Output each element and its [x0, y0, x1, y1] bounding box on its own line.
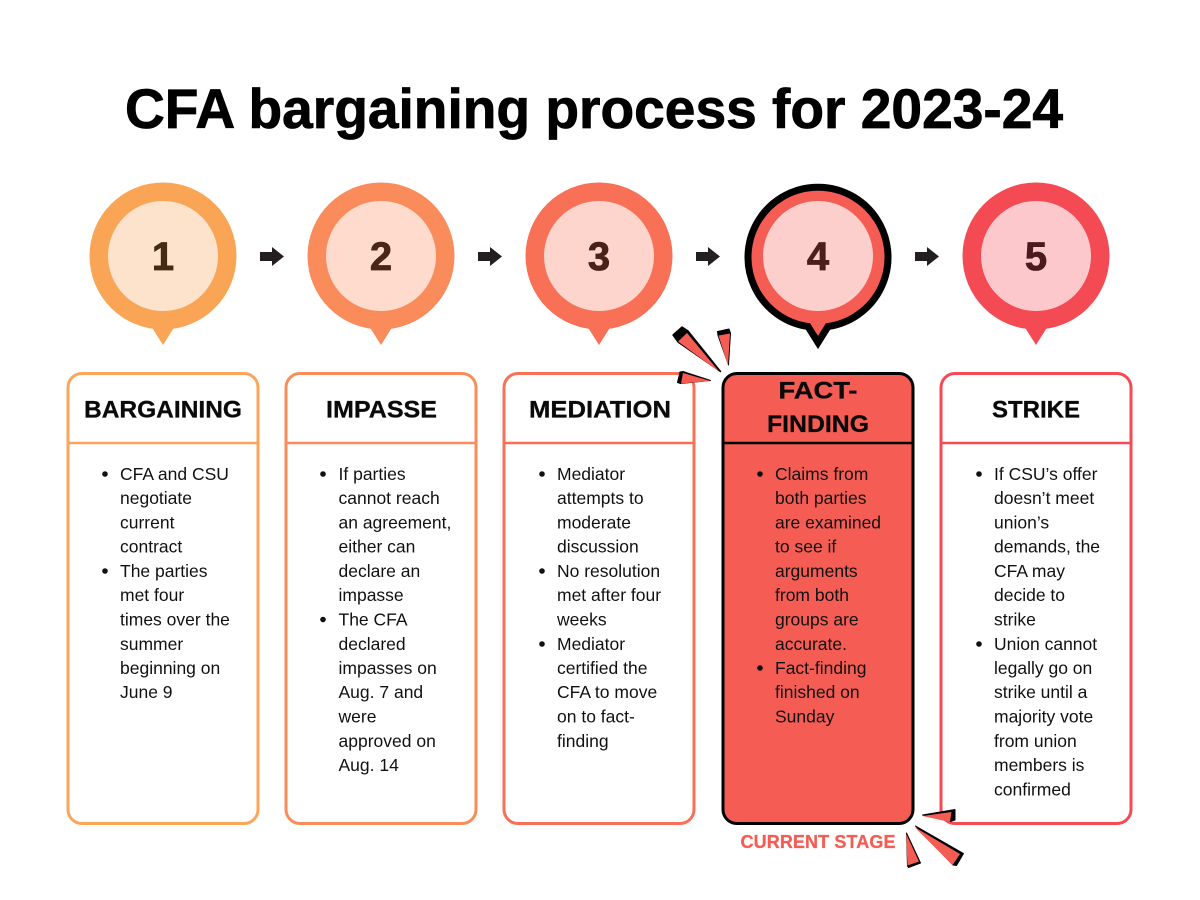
bullet list: mediation: on to fact- — [557, 706, 635, 726]
bullet list: impasse: were — [338, 706, 376, 726]
bullet list: mediation: moderate — [557, 512, 631, 532]
bullet list: impasse: The CFA — [338, 610, 408, 630]
icon: burst marks top left of current stage — [673, 327, 730, 384]
bullet list: fact-finding: both parties — [775, 488, 867, 508]
bullet list: mediation: discussion — [557, 536, 639, 556]
bullet list: strike: strike until a — [994, 682, 1088, 702]
bullet list: strike: members is — [994, 755, 1085, 775]
bullet list: mediation: finding — [557, 731, 609, 751]
bullet list: fact-finding: from both — [775, 585, 849, 605]
heading: impasse: IMPASSE — [326, 396, 437, 424]
bullet list: fact-finding: Fact-finding — [775, 658, 866, 678]
bullet list: bargaining: June 9 — [120, 682, 173, 702]
bullet list: mediation: No resolution — [557, 561, 660, 581]
bullet list: strike: If CSU’s offer — [994, 464, 1098, 484]
bullet list: fact-finding: Claims from — [775, 464, 868, 484]
bullet list: strike: from union — [994, 731, 1077, 751]
bullet list: bargaining: times over the — [120, 610, 230, 630]
bullet list: strike — [976, 464, 1100, 800]
panel: impasse — [286, 374, 476, 824]
bullet list: strike: Union cannot — [994, 634, 1097, 654]
bullet list: strike: union’s — [994, 512, 1049, 532]
step 4 marker (current): 4 — [807, 235, 830, 279]
step 1 marker: 1 — [152, 235, 174, 279]
arrow 1 to 2 — [260, 247, 284, 266]
bullet list: fact-finding: arguments — [775, 561, 858, 581]
arrow 3 to 4 — [696, 247, 720, 266]
bullet list: mediation: met after four — [557, 585, 661, 605]
step 5 marker: 5 — [1025, 235, 1047, 279]
heading: bargaining: BARGAINING — [84, 396, 242, 424]
bullet list: impasse: an agreement, — [338, 512, 451, 532]
bullet list: strike: majority vote — [994, 706, 1093, 726]
bullet list: mediation: attempts to — [557, 488, 644, 508]
panel: strike — [941, 374, 1131, 824]
bullet list: impasse: Aug. 14 — [338, 755, 399, 775]
arrow 2 to 3 — [478, 247, 502, 266]
bullet list: bargaining: CFA and CSU — [120, 464, 229, 484]
bullet list: bargaining: contract — [120, 536, 182, 556]
bullet list: impasse: approved on — [338, 731, 436, 751]
bullet list: impasse: declared — [338, 634, 406, 654]
bullet list: strike: decide to — [994, 585, 1065, 605]
title: CFA bargaining process for 2023-24 — [125, 77, 1063, 140]
bullet list: bargaining: current — [120, 512, 175, 532]
step 2 marker — [308, 182, 454, 345]
bullet list: fact-finding: accurate. — [775, 634, 847, 654]
bullet list: bargaining: negotiate — [120, 488, 192, 508]
bullet list: fact-finding: to see if — [775, 536, 836, 556]
bullet list: mediation: certified the — [557, 658, 647, 678]
bullet list: impasse: If parties — [338, 464, 406, 484]
bullet list: strike: strike — [994, 610, 1036, 630]
bullet list: bargaining: summer — [120, 634, 183, 654]
bullet list: fact-finding: finished on — [775, 682, 860, 702]
step 2 marker: 2 — [370, 235, 392, 279]
bullet list: strike: confirmed — [994, 780, 1071, 800]
bullet list: mediation: weeks — [556, 610, 607, 630]
bullet list: impasse: impasse — [338, 585, 404, 605]
bullet list: strike: doesn’t meet — [994, 488, 1094, 508]
panel: mediation — [504, 374, 694, 824]
step 3 marker — [526, 182, 672, 345]
step 4 marker (current) — [748, 187, 888, 342]
bullet list: mediation: CFA to move — [557, 682, 657, 702]
arrow 4 to 5 — [915, 247, 939, 266]
bullet list: mediation — [539, 464, 661, 751]
heading: fact-finding — [767, 378, 869, 438]
bullet list: mediation: Mediator — [557, 464, 625, 484]
bullet list: bargaining: met four — [120, 585, 184, 605]
bullet list: fact-finding: groups are — [775, 610, 859, 630]
heading: fact-finding: FINDING — [767, 411, 869, 438]
icon: burst marks bottom right of current stage — [906, 810, 964, 868]
bullet list: impasse: either can — [338, 536, 415, 556]
step 1 marker — [90, 182, 236, 345]
heading: fact-finding: FACT- — [778, 378, 858, 404]
bullet list: impasse: declare an — [338, 561, 420, 581]
bullet list: fact-finding — [757, 464, 881, 726]
bullet list: impasse: cannot reach — [338, 488, 440, 508]
bullet list: mediation: Mediator — [557, 634, 625, 654]
bullet list: bargaining: beginning on — [120, 658, 220, 678]
bullet list: fact-finding: are examined — [775, 512, 881, 532]
current stage label: CURRENT STAGE — [740, 832, 896, 852]
panel: bargaining — [68, 374, 258, 824]
bullet list: bargaining — [102, 464, 230, 702]
bullet list: strike: demands, the — [994, 536, 1100, 556]
step 3 marker: 3 — [588, 235, 610, 279]
bullet list: impasse: Aug. 7 and — [338, 682, 423, 702]
heading: strike: STRIKE — [992, 396, 1080, 424]
bullet list: impasse: impasses on — [338, 658, 437, 678]
bullet list: bargaining: The parties — [120, 561, 208, 581]
panel: fact-finding (current stage) — [723, 374, 913, 824]
bullet list: impasse — [320, 464, 451, 775]
bullet list: strike: legally go on — [994, 658, 1092, 678]
heading: mediation: MEDIATION — [529, 396, 671, 424]
bullet list: fact-finding: Sunday — [775, 706, 835, 726]
bullet list: strike: CFA may — [994, 561, 1065, 581]
step 5 marker — [962, 182, 1110, 345]
